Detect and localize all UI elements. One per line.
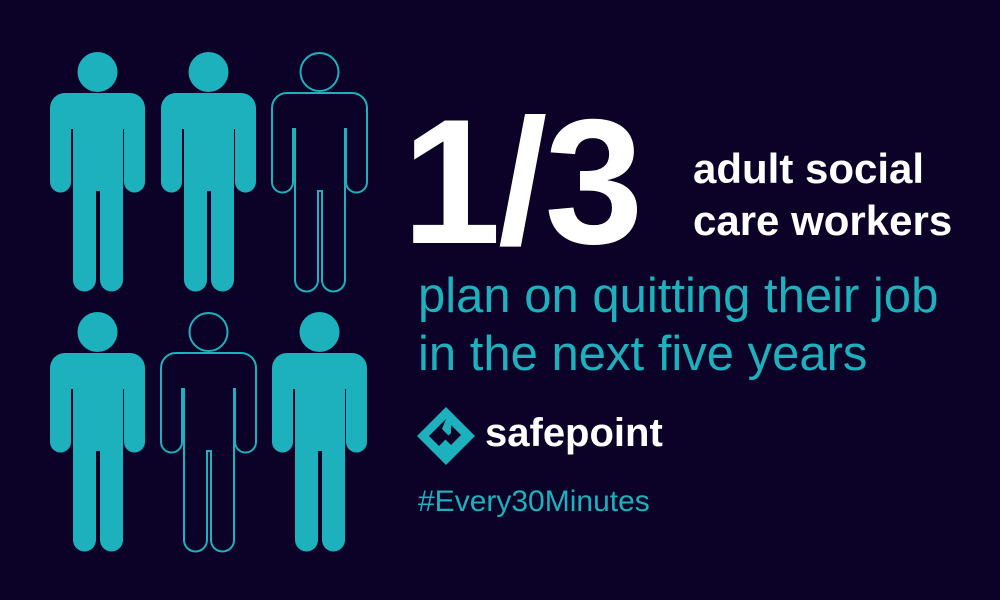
- logo wordmark: safepoint: [485, 411, 663, 455]
- hashtag: #Every30Minutes: [418, 485, 650, 518]
- icon: person filled 1: [50, 52, 145, 292]
- subject text: care workers: [693, 197, 952, 244]
- main statement: plan on quitting their job: [418, 269, 938, 323]
- main statement: in the next five years: [418, 327, 867, 381]
- logo: [417, 407, 663, 465]
- people icons: [50, 52, 368, 552]
- subject text: adult social: [693, 145, 924, 192]
- main statement: [418, 269, 938, 381]
- subject text: [693, 145, 952, 244]
- icon: person outline 3: [272, 53, 367, 292]
- icon: person outline 5: [161, 313, 256, 552]
- icon: logo mark: [417, 407, 475, 465]
- icon: person filled 6: [272, 312, 367, 552]
- big fraction: 1/3: [402, 82, 640, 281]
- icon: person filled 4: [50, 312, 145, 552]
- icon: person filled 2: [161, 52, 256, 292]
